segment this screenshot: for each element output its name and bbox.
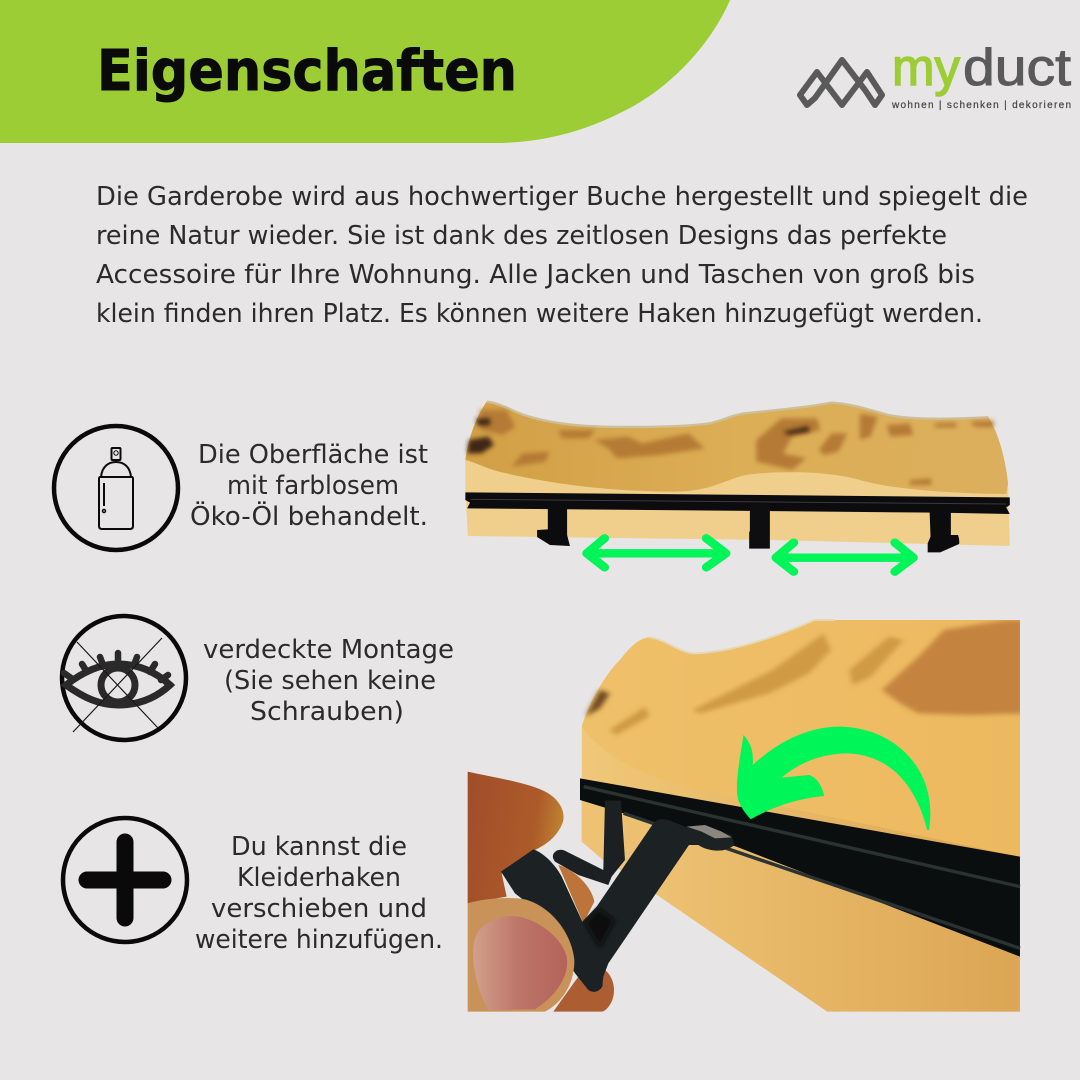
burn mark bbox=[585, 690, 610, 717]
photo: wooden coat rack front view bbox=[465, 402, 1010, 572]
icon: plus bbox=[63, 818, 187, 942]
green double arrow right bbox=[776, 543, 913, 572]
intro paragraph: Accessoire für Ihre Wohnung. Alle Jacken und Taschen von groß bis bbox=[96, 260, 975, 290]
icon: crossed-out eye bbox=[62, 616, 186, 740]
intro paragraph: reine Natur wieder. Sie ist dank des zeitlosen Designs das perfekte bbox=[96, 221, 947, 251]
wood between post and arm bbox=[624, 817, 652, 865]
feature text: surface: Öko-Öl behandelt. bbox=[190, 502, 428, 532]
logo bbox=[800, 39, 1072, 111]
grain patches bbox=[609, 633, 904, 735]
green curved arrow bbox=[737, 727, 930, 830]
logo wordmark: my bbox=[892, 39, 960, 97]
green header shape bbox=[0, 0, 730, 143]
hook worn tip bbox=[687, 825, 732, 838]
intro paragraph bbox=[96, 182, 1028, 329]
feature text: hidden mounting: Schrauben) bbox=[250, 697, 404, 727]
right hook bbox=[928, 507, 959, 552]
feature text: movable hooks bbox=[195, 832, 443, 955]
wood body bbox=[582, 620, 1020, 1012]
logo wordmark: duct bbox=[963, 39, 1072, 97]
black hook bbox=[501, 819, 734, 992]
feature text: hidden mounting: (Sie sehen keine bbox=[224, 666, 436, 696]
feature text: surface: Die Oberfläche ist bbox=[198, 440, 428, 470]
grain patches bbox=[480, 410, 994, 485]
title: Eigenschaften bbox=[97, 39, 517, 104]
wood figure bbox=[585, 620, 1027, 735]
lower finger bbox=[553, 970, 614, 1012]
feature text: hidden mounting: verdeckte Montage bbox=[203, 635, 454, 665]
rear hook bbox=[553, 801, 625, 885]
left hook bbox=[537, 503, 570, 546]
hook shadow bbox=[585, 908, 615, 948]
index finger bbox=[468, 772, 564, 903]
burn marks bbox=[467, 418, 810, 453]
feature text: surface bbox=[190, 440, 428, 532]
dark figure in wood bbox=[882, 620, 1027, 715]
intro paragraph: klein finden ihren Platz. Es können weitere Haken hinzugefügt werden. bbox=[96, 299, 983, 329]
black rail bbox=[465, 492, 1010, 514]
thumb nail bbox=[473, 916, 567, 1010]
thumb bbox=[468, 898, 574, 1012]
live edge oiled area bbox=[465, 402, 1008, 494]
logo mark bbox=[800, 60, 882, 105]
black rail bbox=[580, 778, 1020, 957]
icon: spray can bbox=[54, 426, 178, 550]
feature text: movable hooks: weitere hinzufügen. bbox=[195, 925, 443, 955]
wood body bbox=[465, 402, 1010, 546]
feature text: movable hooks: verschieben und bbox=[211, 894, 427, 924]
feature text: surface: mit farblosem bbox=[227, 471, 399, 501]
upper wood area bbox=[582, 620, 1020, 857]
logo tagline: wohnen | schenken | dekorieren bbox=[891, 100, 1071, 111]
logo wordmark bbox=[892, 39, 1072, 97]
bark rim bbox=[487, 402, 988, 427]
intro paragraph: Die Garderobe wird aus hochwertiger Buche hergestellt und spiegelt die bbox=[96, 182, 1028, 212]
middle hook bbox=[749, 504, 770, 549]
feature text: movable hooks: Kleiderhaken bbox=[237, 863, 401, 893]
feature text: hidden mounting bbox=[203, 635, 454, 727]
feature text: movable hooks: Du kannst die bbox=[231, 832, 407, 862]
middle finger bbox=[558, 865, 594, 923]
photo: hook being attached to the rail bbox=[580, 620, 1027, 1012]
bark rim bbox=[649, 620, 835, 653]
hand holding the hook bbox=[468, 772, 734, 1012]
green double arrow left bbox=[587, 538, 726, 567]
wood left of post bbox=[582, 802, 605, 862]
